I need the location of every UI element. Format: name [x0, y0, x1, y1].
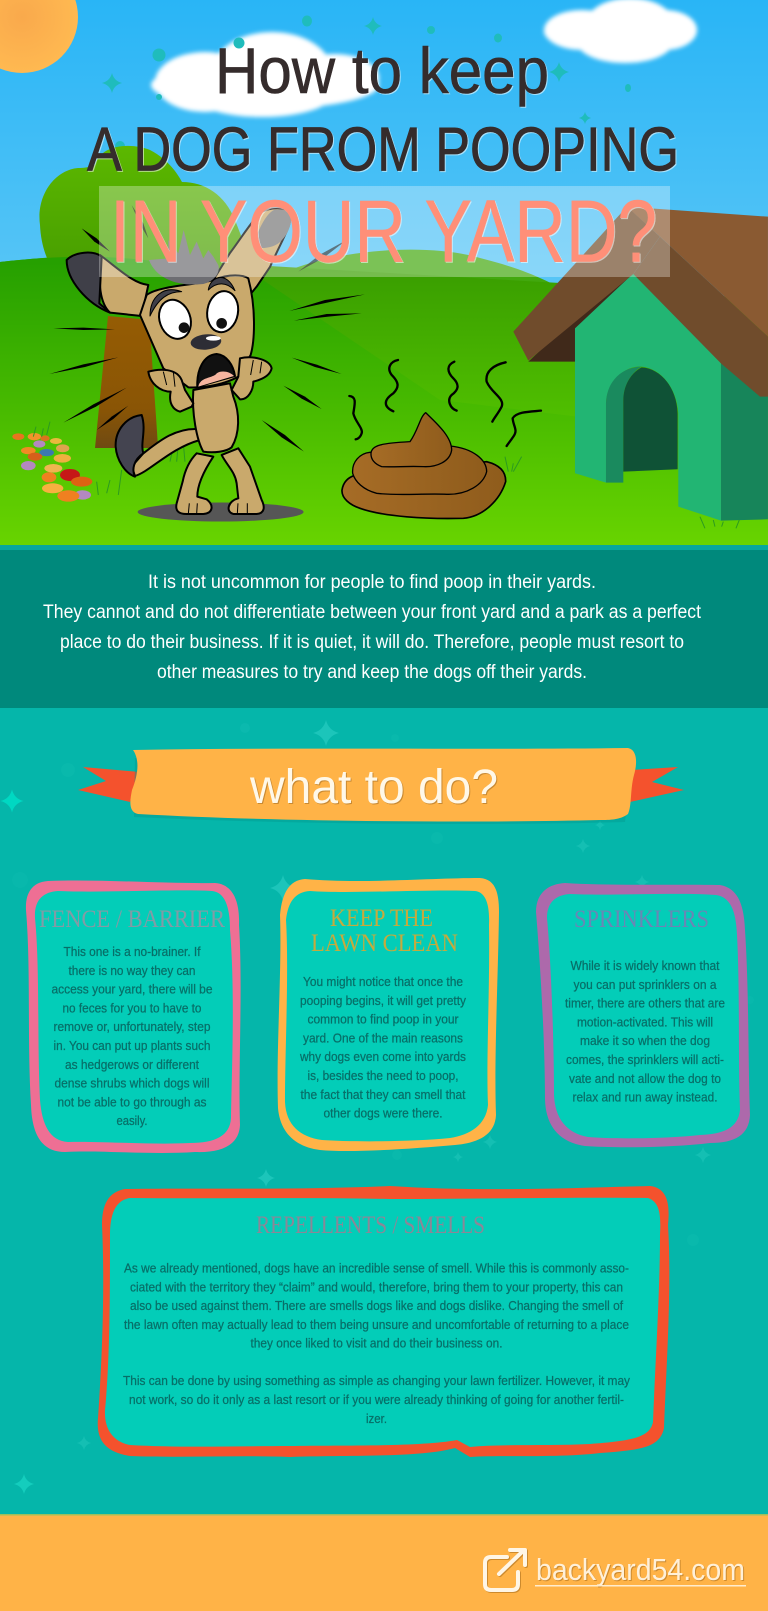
panel text: not be able to go through as [58, 1094, 207, 1109]
title highlight box [99, 186, 670, 277]
dog shadow [138, 502, 304, 522]
dog eyebrows [150, 277, 235, 316]
dog house right wall [721, 362, 768, 521]
panel text: relax and run away instead. [572, 1090, 718, 1105]
scared dog character [67, 208, 292, 514]
panel text: easily. [116, 1113, 148, 1128]
panel text: in. You can put up plants such [54, 1038, 210, 1053]
front hill [0, 257, 768, 546]
panel text: there is no way they can [68, 963, 196, 978]
dog house door [606, 367, 642, 483]
dog house front wall [575, 273, 721, 521]
panel: keep the lawn clean [278, 878, 499, 1151]
panel: repellents / smells [98, 1186, 669, 1457]
panel text: as hedgerows or different [65, 1057, 199, 1072]
smell lines [349, 360, 541, 446]
footer link text: backyard54.com [536, 1552, 745, 1587]
sparkles in the sky [102, 16, 631, 151]
banner: what to do [78, 748, 684, 824]
dog head [140, 275, 254, 387]
panel text: dense shrubs which dogs will [54, 1076, 210, 1091]
panel: sprinklers [536, 883, 750, 1147]
intro text: other measures to try and keep the dogs off their yards. [157, 662, 587, 683]
dog paws [148, 370, 193, 412]
panel text: motion-activated. This will [577, 1014, 713, 1029]
title [87, 34, 679, 280]
banner ribbon tails [78, 767, 684, 802]
cloud left [151, 32, 379, 117]
dog left ear [100, 255, 148, 316]
footer [0, 1514, 768, 1611]
intro text: place to do their business. If it is quiet, it will do. Therefore, people must resort to [60, 632, 684, 653]
dog house roof [627, 207, 768, 337]
panel heading: KEEP THE [330, 905, 433, 932]
icon: external link [485, 1550, 525, 1590]
hero illustration: sky, yard, dog and dog house [0, 0, 768, 546]
tree trunk [95, 316, 158, 448]
dog eyes [154, 289, 241, 343]
panel text: make it so when the dog [580, 1033, 710, 1048]
panel text: why dogs even come into yards [299, 1049, 466, 1064]
panel text: This one is a no-brainer. If [64, 944, 201, 959]
panel text: This can be done by using something as simple as changing your lawn fertilizer. However, it may [123, 1373, 630, 1388]
intro band [0, 545, 768, 708]
panel text: the fact that they can smell that [300, 1087, 466, 1102]
panel text: ciated with the territory they “claim” and would, therefore, bring them to your property, this can [130, 1279, 623, 1294]
panel heading: SPRINKLERS [574, 906, 709, 933]
ground [0, 256, 768, 546]
tree crown [39, 146, 262, 330]
panel heading: REPELLENTS / SMELLS [256, 1212, 485, 1239]
panel text: vate and not allow the dog to [569, 1071, 721, 1086]
panel text: remove or, unfortunately, step [54, 1019, 210, 1034]
intro text: It is not uncommon for people to find poop in their yards. [148, 572, 596, 593]
intro text [43, 572, 702, 683]
panel text: is, besides the need to poop, [308, 1068, 458, 1083]
intro text: They cannot and do not differentiate between your front yard and a park as a perfect [43, 602, 702, 623]
panel text: other dogs were there. [324, 1106, 442, 1121]
panel: fence / barrier [26, 881, 241, 1153]
banner heading: what to do? [249, 761, 498, 814]
panel text: you can put sprinklers on a [574, 977, 717, 992]
panel text: yard. One of the main reasons [303, 1030, 463, 1045]
banner body [130, 748, 636, 822]
panel text: comes, the sprinklers will acti- [566, 1052, 724, 1067]
poop pile [342, 462, 506, 519]
banner body shadow [134, 756, 632, 824]
panel text: common to find poop in your [308, 1012, 459, 1027]
back hill [240, 250, 580, 340]
panel text: You might notice that once the [303, 974, 463, 989]
panel text: While it is widely known that [570, 958, 720, 973]
panel text: As we already mentioned, dogs have an incredible sense of smell. While this is commonly asso- [124, 1260, 629, 1276]
panel text: also be used against them. There are smells dogs like and dogs dislike. Changing the smell of [130, 1298, 623, 1313]
panel text: izer. [366, 1411, 387, 1426]
dog right ear [213, 208, 290, 297]
panel text [565, 958, 725, 1105]
dog tail [132, 429, 200, 476]
sun [0, 0, 78, 73]
dog house [505, 207, 768, 528]
under roof shadow [528, 270, 634, 362]
panel text [52, 944, 212, 1128]
panel heading: FENCE / BARRIER [39, 906, 225, 933]
panel text: access your yard, there will be [52, 982, 212, 997]
poop with smell lines [342, 360, 541, 519]
title: How to keep [215, 34, 549, 107]
panel heading: LAWN CLEAN [311, 930, 458, 957]
panel text [123, 1260, 630, 1426]
panel text: not work, so do it only as a last resort or if you were already thinking of going for another fertil- [129, 1392, 624, 1407]
panel text: the lawn often may actually lead to them being unsure and uncomfortable of returning to a place [124, 1317, 629, 1332]
dog nose [190, 333, 222, 351]
panel text: pooping begins, it will get pretty [300, 993, 466, 1008]
main teal background [0, 545, 768, 1515]
panel text: no feces for you to have to [62, 1000, 202, 1015]
panel heading [311, 905, 458, 957]
flowers [12, 422, 185, 502]
background sparkles [1, 720, 754, 1494]
panel text [299, 974, 466, 1121]
dog fright lines [49, 205, 365, 452]
panel text: they once liked to visit and do their business on. [250, 1336, 502, 1351]
dog legs and body [176, 453, 213, 514]
dog mouth [197, 354, 235, 387]
cloud right [544, 0, 697, 63]
dog hair [149, 230, 219, 285]
title: IN YOUR YARD? [110, 182, 657, 280]
panel text: timer, there are others that are [565, 996, 725, 1011]
